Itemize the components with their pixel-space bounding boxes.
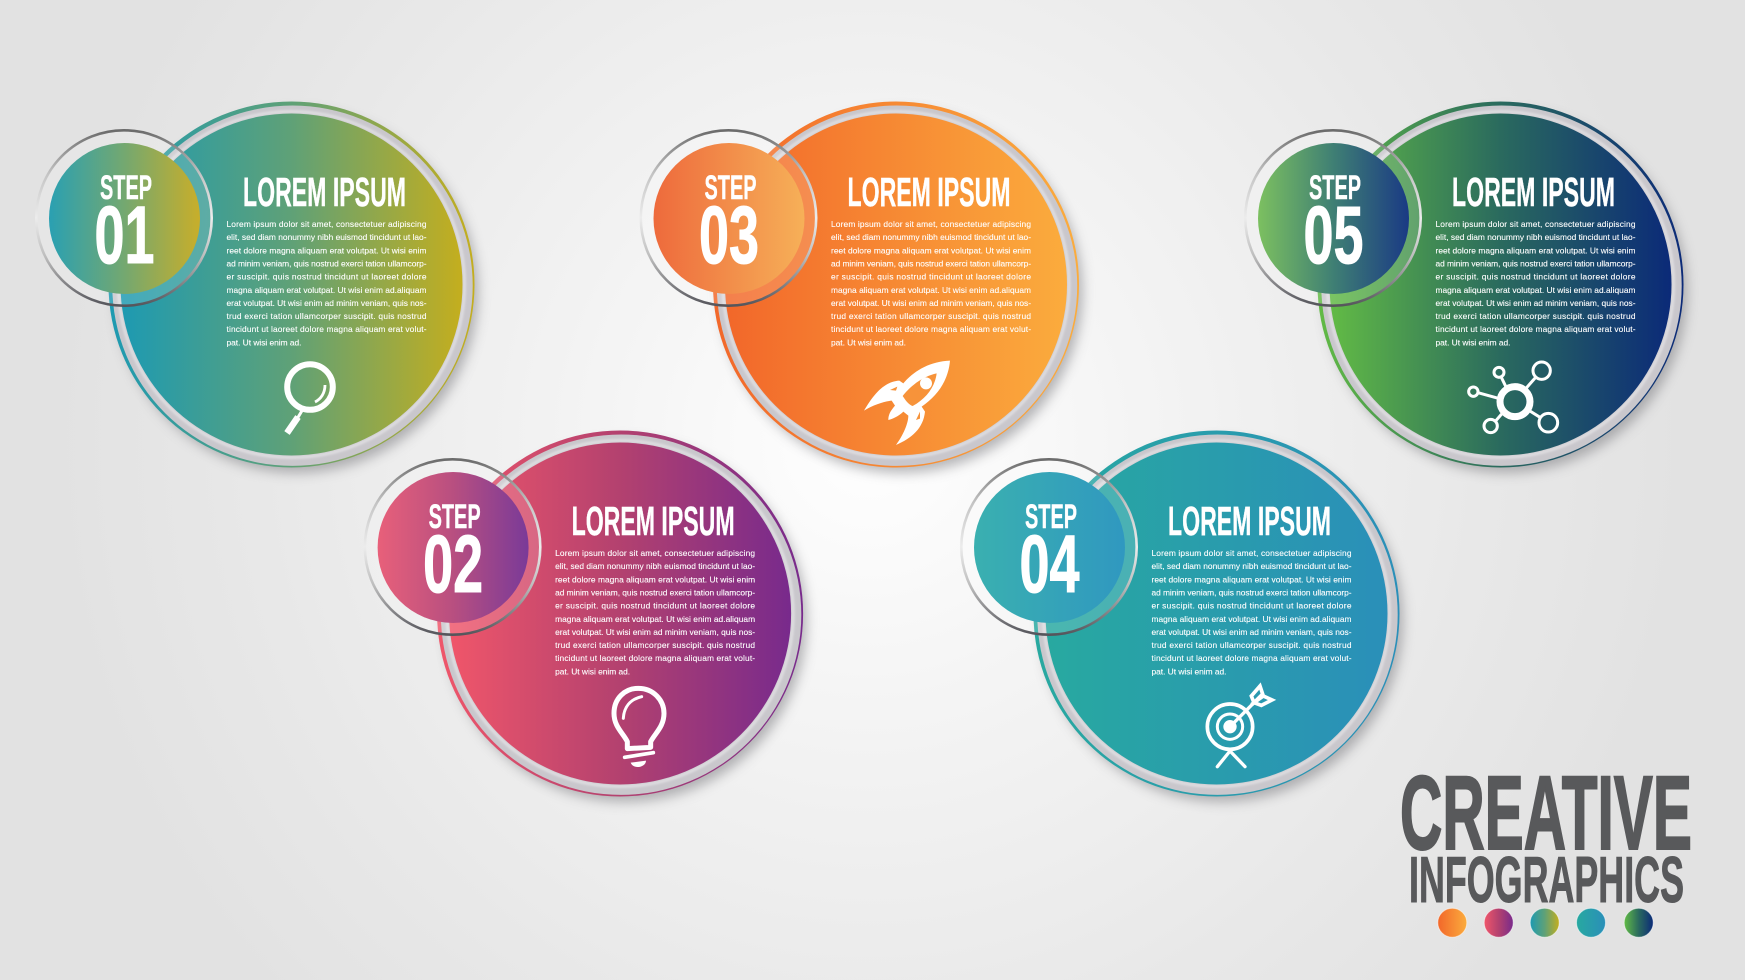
big disc with ring xyxy=(713,102,1082,473)
panel: step 03 xyxy=(641,102,1082,473)
body text: er suscipit. quis nostrud tincidunt ut laoreet dolore xyxy=(555,601,755,611)
body text: magna aliquam erat volutpat. Ut wisi enim ad.aliquam xyxy=(226,285,427,295)
step badge xyxy=(1245,130,1421,306)
body text: pat. Ut wisi enim ad. xyxy=(1152,666,1226,676)
body text: tincidunt ut laoreet dolore magna aliquam erat volut- xyxy=(1436,324,1636,334)
body text: magna aliquam erat volutpat. Ut wisi enim ad.aliquam xyxy=(831,285,1031,295)
icon: rocket xyxy=(864,361,950,445)
step badge: STEP xyxy=(1309,169,1361,207)
body text: magna aliquam erat volutpat. Ut wisi enim ad.aliquam xyxy=(555,614,755,624)
body text xyxy=(831,219,1031,347)
heading: LOREM IPSUM xyxy=(848,169,1010,215)
body text: erat volutpat. Ut wisi enim ad minim veniam, quis nos- xyxy=(226,298,427,308)
panel: step 01 xyxy=(36,102,478,473)
step badge: STEP xyxy=(429,498,481,536)
body text: elit, sed diam nonummy nibh euismod tincidunt ut lao- xyxy=(1436,232,1636,242)
icon: target with arrow xyxy=(1207,686,1272,767)
body text: elit, sed diam nonummy nibh euismod tincidunt ut lao- xyxy=(831,232,1031,242)
body text: er suscipit. quis nostrud tincidunt ut laoreet dolore xyxy=(1152,601,1352,611)
panel: step 02 xyxy=(365,430,807,802)
step badge: STEP xyxy=(1025,498,1077,536)
body text: tincidunt ut laoreet dolore magna aliquam erat volut- xyxy=(831,324,1031,334)
body text: erat volutpat. Ut wisi enim ad minim veniam, quis nos- xyxy=(1436,298,1636,308)
body text xyxy=(1152,548,1352,676)
body text xyxy=(555,548,755,676)
heading: LOREM IPSUM xyxy=(243,169,406,215)
body text: er suscipit. quis nostrud tincidunt ut laoreet dolore xyxy=(226,272,427,282)
body text: ad minim veniam, quis nostrud exerci tation ullamcorp- xyxy=(831,258,1031,268)
body text: ad minim veniam, quis nostrud exerci tation ullamcorp- xyxy=(226,258,427,268)
panel: step 05 xyxy=(1245,102,1687,473)
step badge: 04 xyxy=(1020,519,1080,610)
body text: Lorem ipsum dolor sit amet, consectetuer adipiscing xyxy=(226,219,427,229)
body text: reet dolore magna aliquam erat volutpat. Ut wisi enim xyxy=(555,574,755,584)
body text: ad minim veniam, quis nostrud exerci tation ullamcorp- xyxy=(555,588,755,598)
body text: erat volutpat. Ut wisi enim ad minim veniam, quis nos- xyxy=(555,627,755,637)
step badge: 03 xyxy=(699,190,759,281)
body text: Lorem ipsum dolor sit amet, consectetuer adipiscing xyxy=(1152,548,1352,558)
big disc with ring xyxy=(437,430,807,802)
body text: Lorem ipsum dolor sit amet, consectetuer adipiscing xyxy=(1436,219,1636,229)
body text: reet dolore magna aliquam erat volutpat. Ut wisi enim xyxy=(831,245,1031,255)
body text: pat. Ut wisi enim ad. xyxy=(226,337,302,347)
body text: magna aliquam erat volutpat. Ut wisi enim ad.aliquam xyxy=(1436,285,1636,295)
body text: ad minim veniam, quis nostrud exerci tation ullamcorp- xyxy=(1436,258,1636,268)
body text: trud exerci tation ullamcorper suscipit. quis nostrud xyxy=(831,311,1031,321)
big disc with ring xyxy=(1318,102,1687,473)
body text: Lorem ipsum dolor sit amet, consectetuer adipiscing xyxy=(831,219,1031,229)
step badge: 01 xyxy=(94,190,154,281)
icon: magnifying glass xyxy=(287,364,333,433)
body text: ad minim veniam, quis nostrud exerci tation ullamcorp- xyxy=(1152,588,1352,598)
body text: er suscipit. quis nostrud tincidunt ut laoreet dolore xyxy=(831,272,1031,282)
brand title: creative infographics xyxy=(1400,755,1692,937)
icon: network hub xyxy=(1469,362,1558,433)
body text: trud exerci tation ullamcorper suscipit. quis nostrud xyxy=(1436,311,1636,321)
heading: LOREM IPSUM xyxy=(1168,498,1331,544)
body text: trud exerci tation ullamcorper suscipit. quis nostrud xyxy=(226,311,427,321)
body text: erat volutpat. Ut wisi enim ad minim veniam, quis nos- xyxy=(831,298,1031,308)
body text: elit, sed diam nonummy nibh euismod tincidunt ut lao- xyxy=(555,561,755,571)
body text xyxy=(226,219,427,347)
body text: tincidunt ut laoreet dolore magna aliquam erat volut- xyxy=(1152,653,1352,663)
body text: pat. Ut wisi enim ad. xyxy=(555,666,630,676)
step badge: STEP xyxy=(100,169,152,207)
step badge: STEP xyxy=(704,169,756,207)
heading: LOREM IPSUM xyxy=(1452,169,1615,215)
body text: elit, sed diam nonummy nibh euismod tincidunt ut lao- xyxy=(1152,561,1352,571)
body text: trud exerci tation ullamcorper suscipit. quis nostrud xyxy=(1152,640,1352,650)
step badge xyxy=(641,130,816,306)
big disc with ring xyxy=(1034,430,1403,802)
body text: trud exerci tation ullamcorper suscipit. quis nostrud xyxy=(555,640,755,650)
big disc with ring xyxy=(108,102,478,473)
body text: pat. Ut wisi enim ad. xyxy=(831,337,906,347)
legend dots xyxy=(1438,908,1653,937)
body text: tincidunt ut laoreet dolore magna aliquam erat volut- xyxy=(226,324,427,334)
body text: er suscipit. quis nostrud tincidunt ut laoreet dolore xyxy=(1436,272,1636,282)
step badge: 05 xyxy=(1304,190,1364,281)
body text: tincidunt ut laoreet dolore magna aliquam erat volut- xyxy=(555,653,755,663)
body text: reet dolore magna aliquam erat volutpat. Ut wisi enim xyxy=(1152,574,1352,584)
body text: elit, sed diam nonummy nibh euismod tincidunt ut lao- xyxy=(226,232,427,242)
step badge xyxy=(365,459,540,635)
body text: reet dolore magna aliquam erat volutpat. Ut wisi enim xyxy=(226,245,427,255)
body text: Lorem ipsum dolor sit amet, consectetuer adipiscing xyxy=(555,548,755,558)
body text: pat. Ut wisi enim ad. xyxy=(1436,337,1510,347)
step badge xyxy=(36,130,212,306)
step badge: 02 xyxy=(423,519,483,610)
heading: LOREM IPSUM xyxy=(572,498,735,544)
body text xyxy=(1436,219,1636,347)
body text: magna aliquam erat volutpat. Ut wisi enim ad.aliquam xyxy=(1152,614,1352,624)
step badge xyxy=(961,459,1137,635)
icon: light bulb xyxy=(614,688,664,767)
body text: erat volutpat. Ut wisi enim ad minim veniam, quis nos- xyxy=(1152,627,1352,637)
body text: reet dolore magna aliquam erat volutpat. Ut wisi enim xyxy=(1436,245,1636,255)
panel: step 04 xyxy=(961,430,1403,802)
